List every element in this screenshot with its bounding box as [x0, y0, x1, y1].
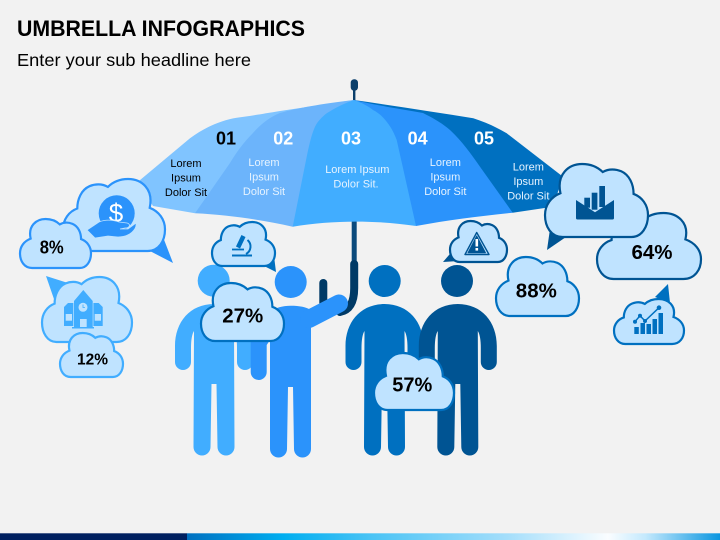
panel 3	[293, 100, 416, 227]
panel 4 label: Ipsum	[430, 172, 460, 184]
title: UMBRELLA INFOGRAPHICS	[17, 16, 305, 41]
callout: 64%: 64%	[632, 241, 672, 264]
panel 5 label: Dolor Sit	[507, 190, 549, 202]
footer bar	[0, 533, 720, 540]
panel 5	[354, 100, 563, 213]
panel 5 label: 05	[474, 128, 494, 148]
panel 2 label	[243, 128, 293, 198]
panel 4 label	[408, 128, 466, 198]
callout: microscope cloud	[212, 222, 276, 272]
umbrella handle	[323, 264, 354, 312]
callout: 57%: 57%	[392, 374, 432, 396]
panel 2 label: Lorem	[248, 157, 280, 169]
icon: microscope	[232, 236, 252, 256]
panel 1 label: Ipsum	[171, 172, 201, 184]
umbrella	[138, 79, 563, 265]
callout: 64%	[597, 213, 701, 279]
icon: chart envelope	[576, 186, 614, 220]
callout: 12%: 12%	[77, 351, 108, 368]
callout: 57%	[374, 353, 454, 410]
panel 2 label: 02	[273, 128, 293, 148]
callout: 88%: 88%	[516, 279, 557, 302]
callout: 8%: 8%	[40, 238, 64, 258]
umbrella finial	[351, 79, 358, 102]
subtitle: Enter your sub headline here	[17, 50, 251, 70]
panel 1 label: Lorem	[170, 158, 202, 170]
panel 2 label: Dolor Sit	[243, 186, 285, 198]
icon: school	[64, 290, 103, 328]
panel 5 label: Ipsum	[513, 176, 543, 188]
callout: 8%	[20, 219, 91, 268]
panel 3 label: 03	[341, 128, 361, 148]
panel 4 label: Lorem	[430, 157, 461, 169]
panel 3 label: Lorem Ipsum	[325, 164, 389, 176]
callout: money cloud	[63, 179, 173, 263]
panel 1 label	[165, 128, 236, 199]
panel 4 label: 04	[408, 128, 428, 148]
callout: chart cloud	[545, 164, 648, 250]
person 4	[419, 265, 497, 455]
panel 3 label	[325, 128, 389, 190]
panel 5 label: Lorem	[513, 162, 544, 174]
callout: 12%	[60, 333, 123, 377]
callout: warning cloud	[443, 221, 507, 262]
panel 1	[138, 100, 354, 213]
icon: money in hand: $	[109, 198, 124, 228]
panel 3 label: Dolor Sit.	[333, 178, 379, 190]
callout: 27%	[201, 283, 284, 341]
panel 1 label: Dolor Sit	[165, 187, 207, 199]
person 1	[175, 265, 253, 455]
icon: growth chart	[633, 305, 663, 334]
panel 5 label	[474, 128, 549, 202]
panel 4 label: Dolor Sit	[424, 186, 466, 198]
panel 2	[195, 100, 354, 227]
callout: 88%	[496, 257, 579, 316]
panel 4	[354, 100, 513, 226]
panel 2 label: Ipsum	[249, 172, 279, 184]
person 3	[346, 265, 424, 455]
callout: school cloud	[42, 276, 132, 342]
umbrella shaft	[352, 215, 357, 265]
callout: growth cloud	[614, 284, 684, 344]
person 2	[251, 266, 339, 458]
icon: warning triangle	[465, 232, 489, 254]
callout: 27%: 27%	[222, 304, 263, 328]
panel 1 label: 01	[216, 128, 236, 148]
